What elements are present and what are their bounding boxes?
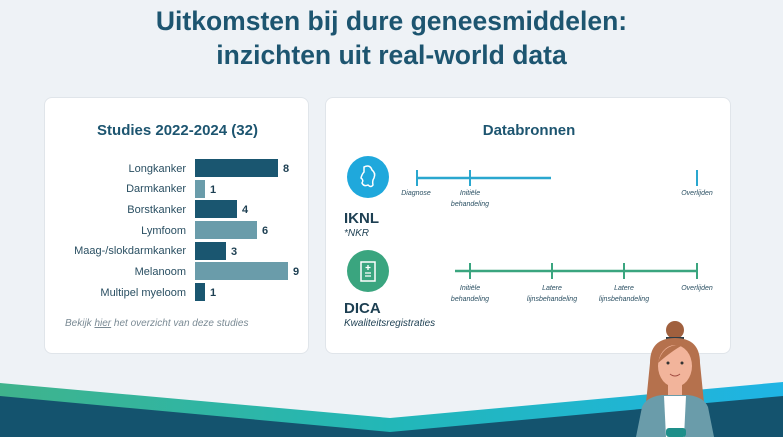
panel: databronnen bbox=[325, 97, 731, 354]
timeline: DICA: lijnsbehandeling bbox=[527, 296, 577, 303]
title bbox=[156, 6, 627, 70]
timeline: DICA: behandeling bbox=[451, 296, 489, 303]
bar chart: Multipel myeloom bbox=[100, 287, 186, 299]
bar chart: 1 bbox=[210, 184, 216, 196]
timeline: DICA: lijnsbehandeling bbox=[599, 296, 649, 303]
title: Uitkomsten bij dure geneesmiddelen: bbox=[156, 6, 627, 36]
title: inzichten uit real-world data bbox=[216, 40, 567, 70]
timeline: IKNL: Diagnose bbox=[401, 190, 431, 197]
timeline: DICA: Overlijden bbox=[681, 285, 713, 292]
bar chart: Darmkanker bbox=[126, 183, 186, 195]
bar chart: 4 bbox=[242, 204, 249, 216]
timeline: IKNL: Overlijden bbox=[681, 190, 713, 197]
heading: studies: Studies 2022-2024 (32) bbox=[97, 122, 258, 139]
panel: databronnen: Kwaliteitsregistraties bbox=[344, 318, 435, 329]
timeline: IKNL bbox=[401, 170, 713, 208]
icon: IKNL map bbox=[347, 156, 389, 198]
link text: Bekijk hier het overzicht van deze studies bbox=[65, 318, 248, 329]
bar chart: 8 bbox=[283, 163, 289, 175]
bar chart: Maag-/slokdarmkanker bbox=[74, 245, 186, 257]
DICA label: DICA bbox=[344, 300, 381, 317]
illustration: woman bbox=[636, 321, 714, 437]
heading: databronnen: Databronnen bbox=[483, 122, 575, 139]
bar chart: 6 bbox=[262, 225, 268, 237]
bar chart: 1 bbox=[210, 287, 216, 299]
timeline: DICA: Latere bbox=[614, 285, 634, 292]
bar chart: 3 bbox=[231, 246, 237, 258]
timeline: DICA: Initiële bbox=[460, 285, 480, 292]
timeline: DICA bbox=[451, 263, 713, 303]
bar chart: Lymfoom bbox=[141, 225, 186, 237]
timeline: IKNL: behandeling bbox=[451, 201, 489, 208]
IKNL label: IKNL bbox=[344, 210, 379, 227]
bar chart bbox=[74, 159, 299, 301]
bar chart: Melanoom bbox=[135, 266, 186, 278]
timeline: IKNL: Initiële bbox=[460, 190, 480, 197]
bar chart: Longkanker bbox=[128, 163, 186, 175]
icon: DICA hospital bbox=[347, 250, 389, 292]
timeline: DICA: Latere bbox=[542, 285, 562, 292]
bar chart: 9 bbox=[293, 266, 299, 278]
panel: studies bbox=[44, 97, 309, 354]
panel: databronnen: *NKR bbox=[344, 228, 369, 239]
bar chart: Borstkanker bbox=[127, 204, 186, 216]
